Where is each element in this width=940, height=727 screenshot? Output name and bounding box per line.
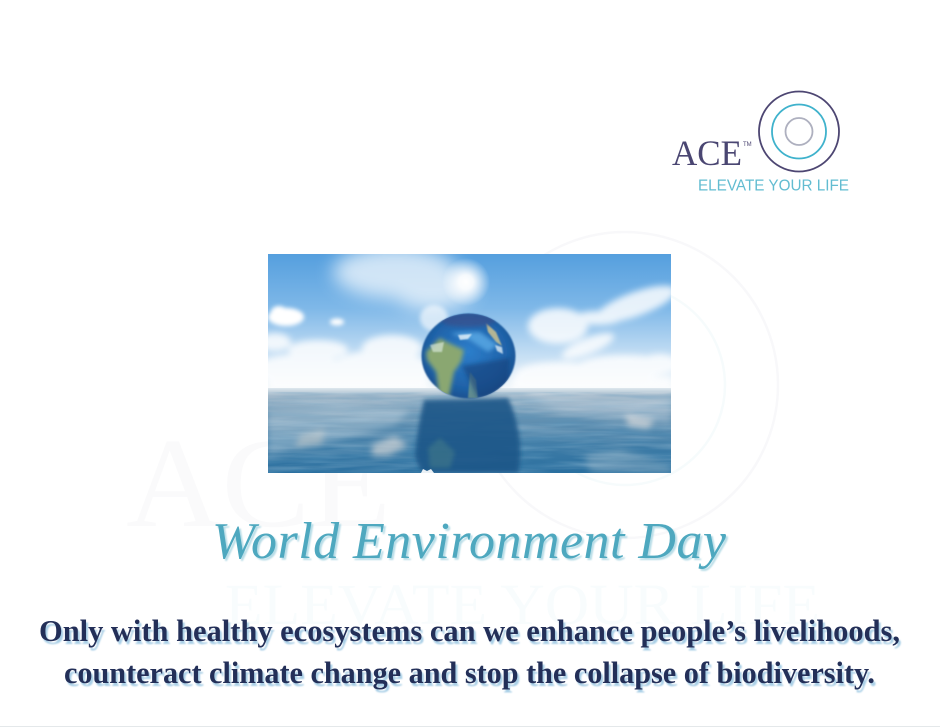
diffuse upper cloud — [333, 246, 474, 310]
small cloud behind globe — [420, 305, 448, 331]
foam at lower edge — [421, 469, 434, 473]
sea — [268, 388, 671, 473]
message shadow: Only with healthy ecosystems can we enhance people’s livelihoods, — [41, 616, 902, 651]
dark top — [440, 313, 496, 327]
continents — [426, 338, 464, 396]
watermark: faint ACE logo: ELEVATE YOUR LIFE — [225, 572, 820, 637]
message line one: Only with healthy ecosystems can we enhance people’s livelihoods, — [39, 613, 900, 648]
cloud reflections on water — [268, 398, 671, 473]
globe — [422, 313, 516, 398]
right clouds — [512, 278, 680, 390]
heading shadow: World Environment Day — [214, 515, 729, 572]
left clouds — [268, 306, 344, 326]
left cloud bank — [255, 333, 430, 390]
heading: World Environment Day — [212, 513, 729, 572]
logo: ACE Elevate Your Life — [672, 92, 849, 194]
message text — [39, 613, 902, 693]
heading text: World Environment Day — [212, 513, 727, 570]
logo tagline: ELEVATE YOUR LIFE — [698, 178, 849, 194]
message shadow — [41, 616, 902, 693]
logo rings — [759, 92, 839, 172]
sun — [446, 259, 489, 304]
logo wordmark: ACE — [672, 133, 742, 173]
water ripples — [268, 392, 671, 473]
sky — [268, 254, 671, 390]
watermark: faint ACE logo — [126, 232, 820, 637]
dark lower ocean — [462, 358, 510, 398]
photo: globe floating on the ocean — [255, 246, 680, 473]
watermark: faint ACE logo: ACE — [126, 412, 391, 554]
globe reflection — [415, 398, 520, 473]
message line two: counteract climate change and stop the collapse of biodiversity. — [64, 655, 875, 690]
clouds — [268, 254, 671, 388]
globe cloud bands — [450, 332, 498, 352]
trademark: TM — [743, 142, 752, 148]
message shadow: counteract climate change and stop the collapse of biodiversity. — [66, 658, 877, 693]
